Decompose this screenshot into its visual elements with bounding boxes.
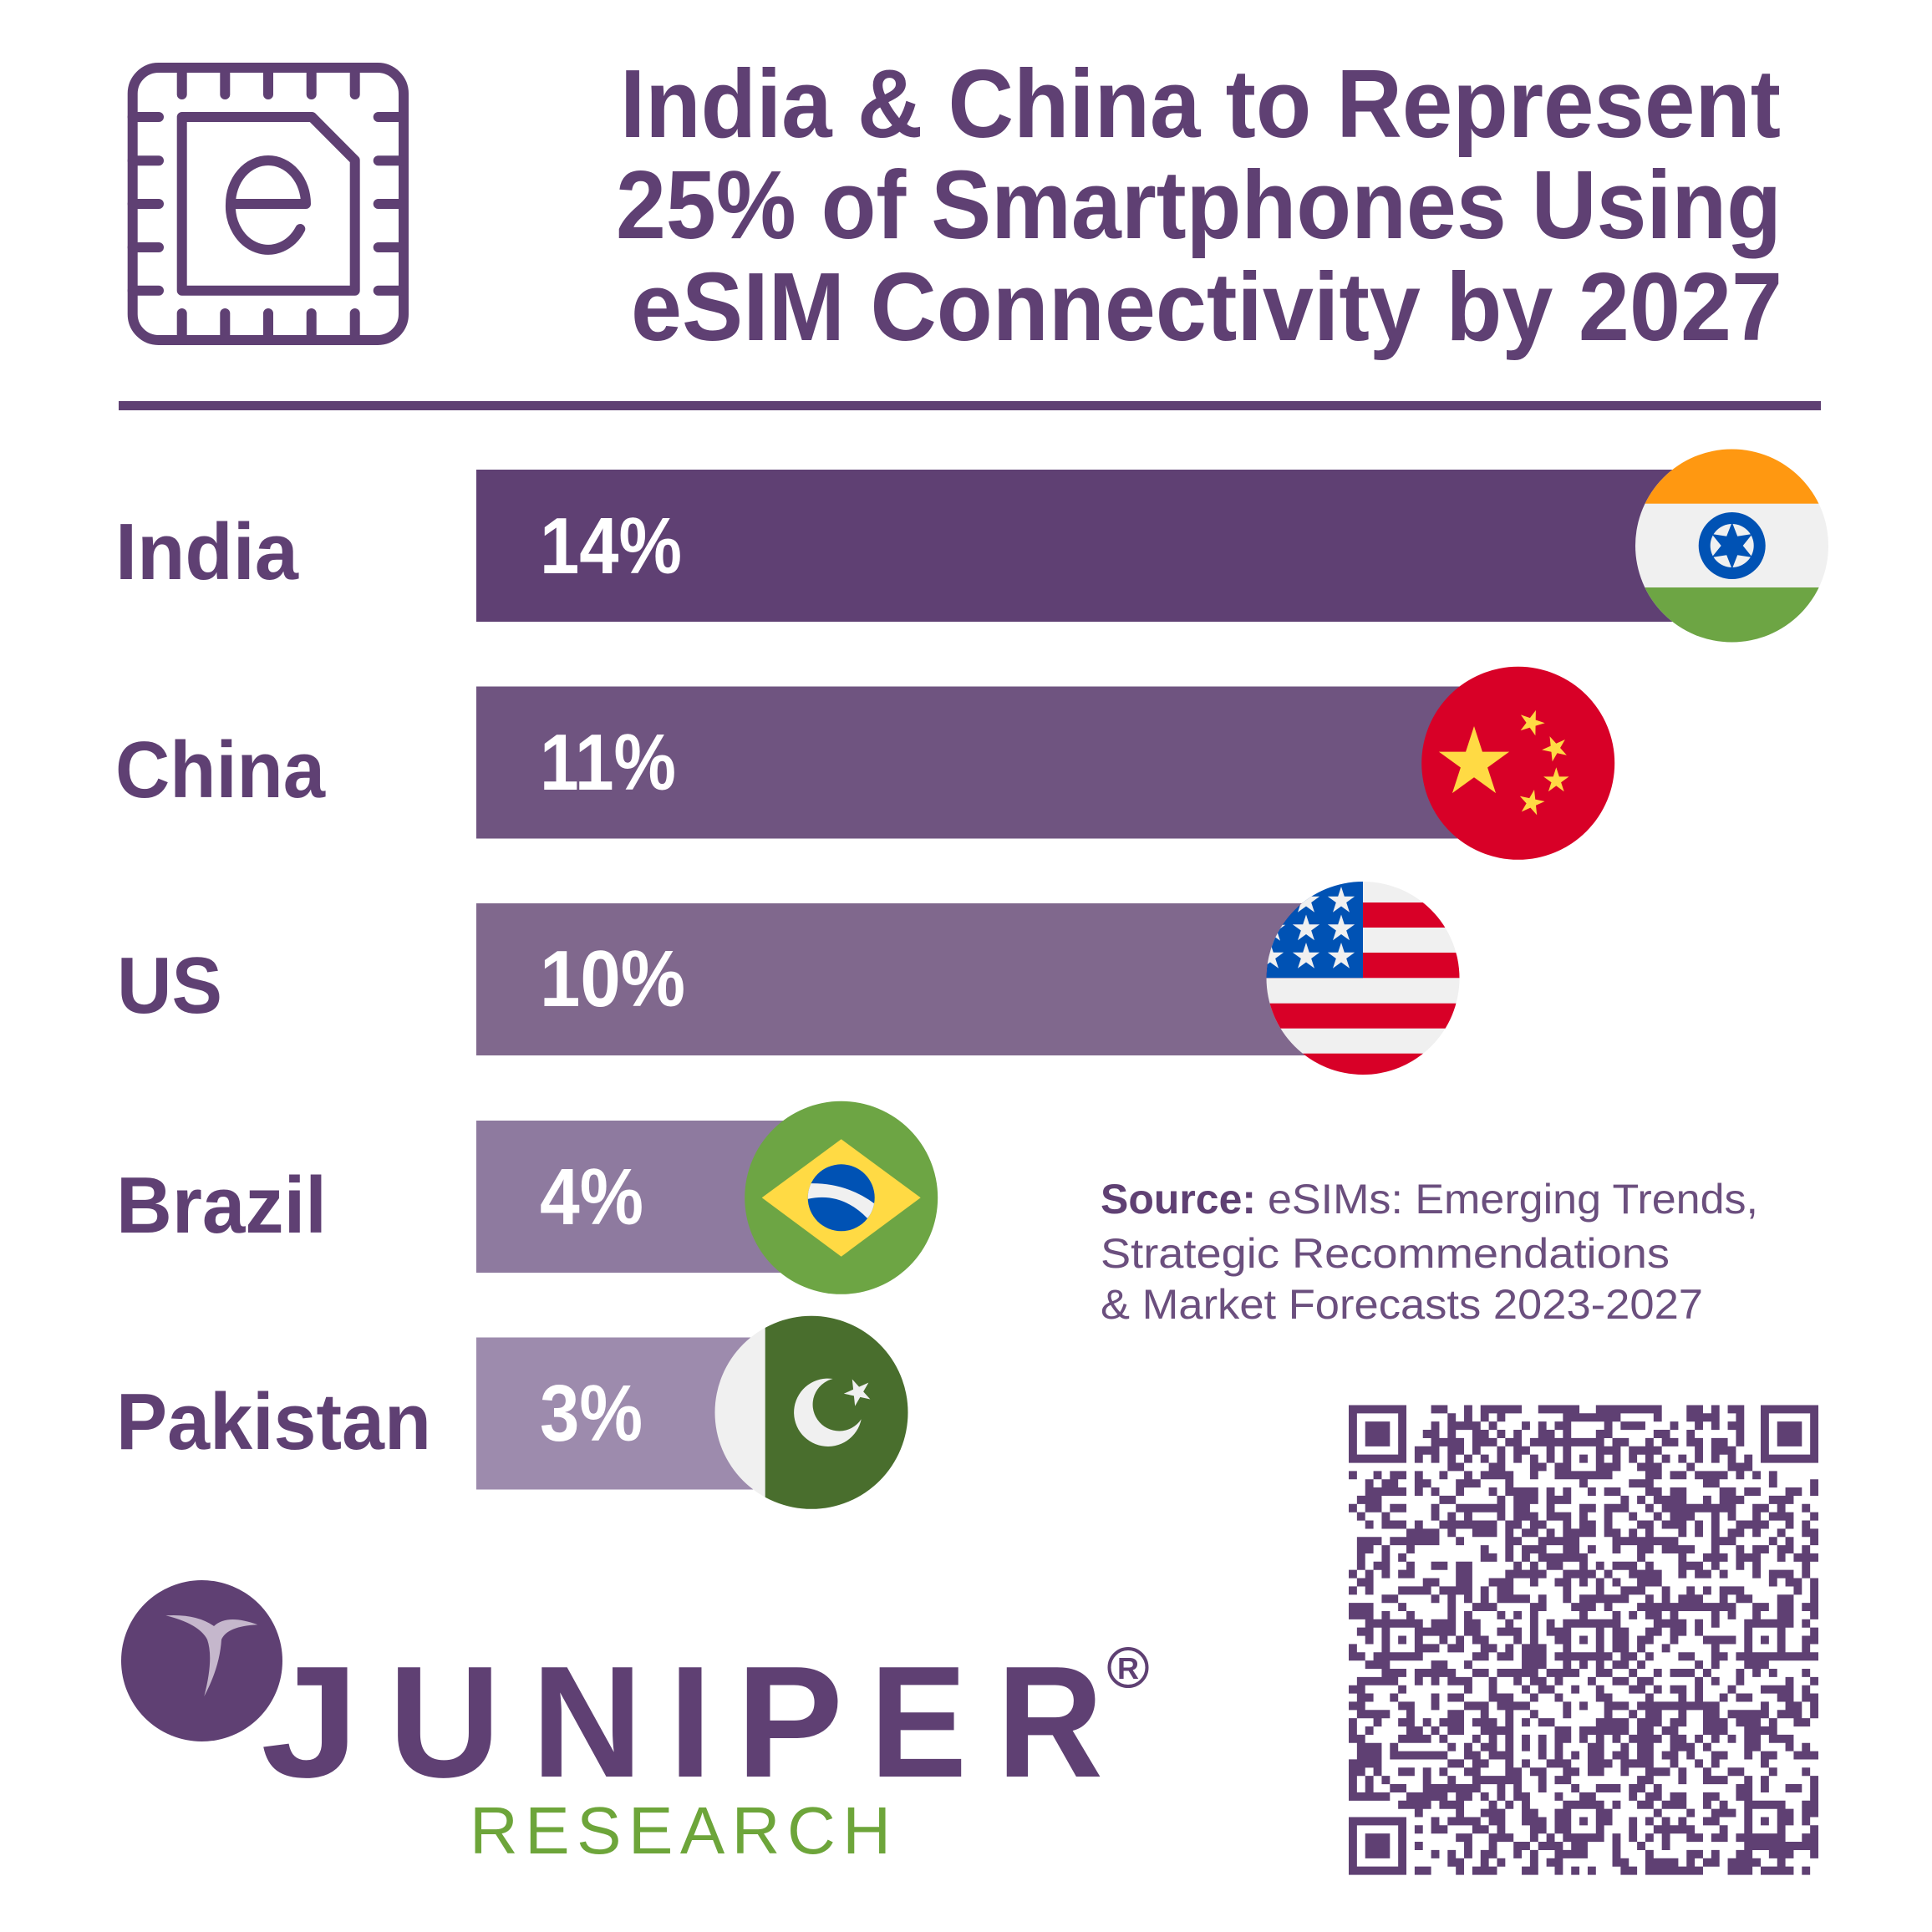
country label: Brazil: Brazil <box>116 1161 327 1250</box>
wordmark: JUNIPER: J <box>261 1634 359 1811</box>
QR code <box>1349 1409 1818 1871</box>
title: eSIM Connectivity by 2027 <box>631 252 1782 361</box>
title: India & China to Represent <box>620 49 1781 158</box>
source note <box>1101 1176 1758 1328</box>
row: India <box>115 443 1838 646</box>
country label: China: China <box>115 725 326 815</box>
wordmark: JUNIPER: U <box>389 1634 501 1811</box>
flag: US <box>1257 877 1462 1079</box>
bar chart <box>115 443 1838 1513</box>
bar: Pakistan 3% <box>476 1337 811 1489</box>
value: 10%: 10% <box>540 934 685 1024</box>
bar: China 11% <box>476 687 1518 839</box>
row: Brazil <box>116 1101 938 1294</box>
header divider <box>119 401 1821 410</box>
wordmark: JUNIPER: I <box>669 1634 712 1811</box>
title: 25% of Smartphones Using <box>616 150 1782 259</box>
row: China <box>115 667 1614 860</box>
wordmark: JUNIPER: E <box>870 1634 967 1811</box>
flag: Pakistan <box>715 1312 912 1513</box>
value: 11%: 11% <box>540 718 676 807</box>
flag: Brazil <box>745 1101 938 1294</box>
value: 4%: 4% <box>540 1152 643 1242</box>
country label: US: US <box>117 941 222 1030</box>
country label: India: India <box>115 507 299 597</box>
registered mark <box>1110 1649 1146 1686</box>
icon: eSIM chip <box>133 68 404 340</box>
value: 14%: 14% <box>540 501 682 591</box>
source note: Source: <box>1101 1176 1256 1223</box>
wordmark: JUNIPER <box>261 1634 1103 1811</box>
logo mark: circle with bird <box>121 1580 282 1741</box>
bar: Brazil 4% <box>476 1121 841 1273</box>
wordmark: RESEARCH: RESEARCH <box>470 1793 891 1868</box>
bar: US 10% <box>476 903 1363 1055</box>
country label: Pakistan: Pakistan <box>116 1377 431 1467</box>
registered mark: R <box>1117 1651 1139 1685</box>
title <box>616 49 1782 361</box>
row: US <box>117 877 1462 1079</box>
value: 3%: 3% <box>540 1369 643 1458</box>
bar: India 14% <box>476 470 1731 622</box>
row: Pakistan <box>116 1312 912 1513</box>
source note: eSIMs: Emerging Trends, <box>1268 1176 1758 1223</box>
wordmark: JUNIPER: R <box>997 1634 1103 1811</box>
source note: & Market Forecasts 2023-2027 <box>1101 1281 1703 1328</box>
source note: Strategic Recommendations <box>1101 1230 1670 1277</box>
wordmark: JUNIPER: N <box>531 1634 643 1811</box>
wordmark: JUNIPER: P <box>736 1634 843 1811</box>
logo: Juniper Research <box>121 1580 1146 1868</box>
flag: India <box>1635 450 1828 642</box>
flag: China <box>1421 667 1614 860</box>
